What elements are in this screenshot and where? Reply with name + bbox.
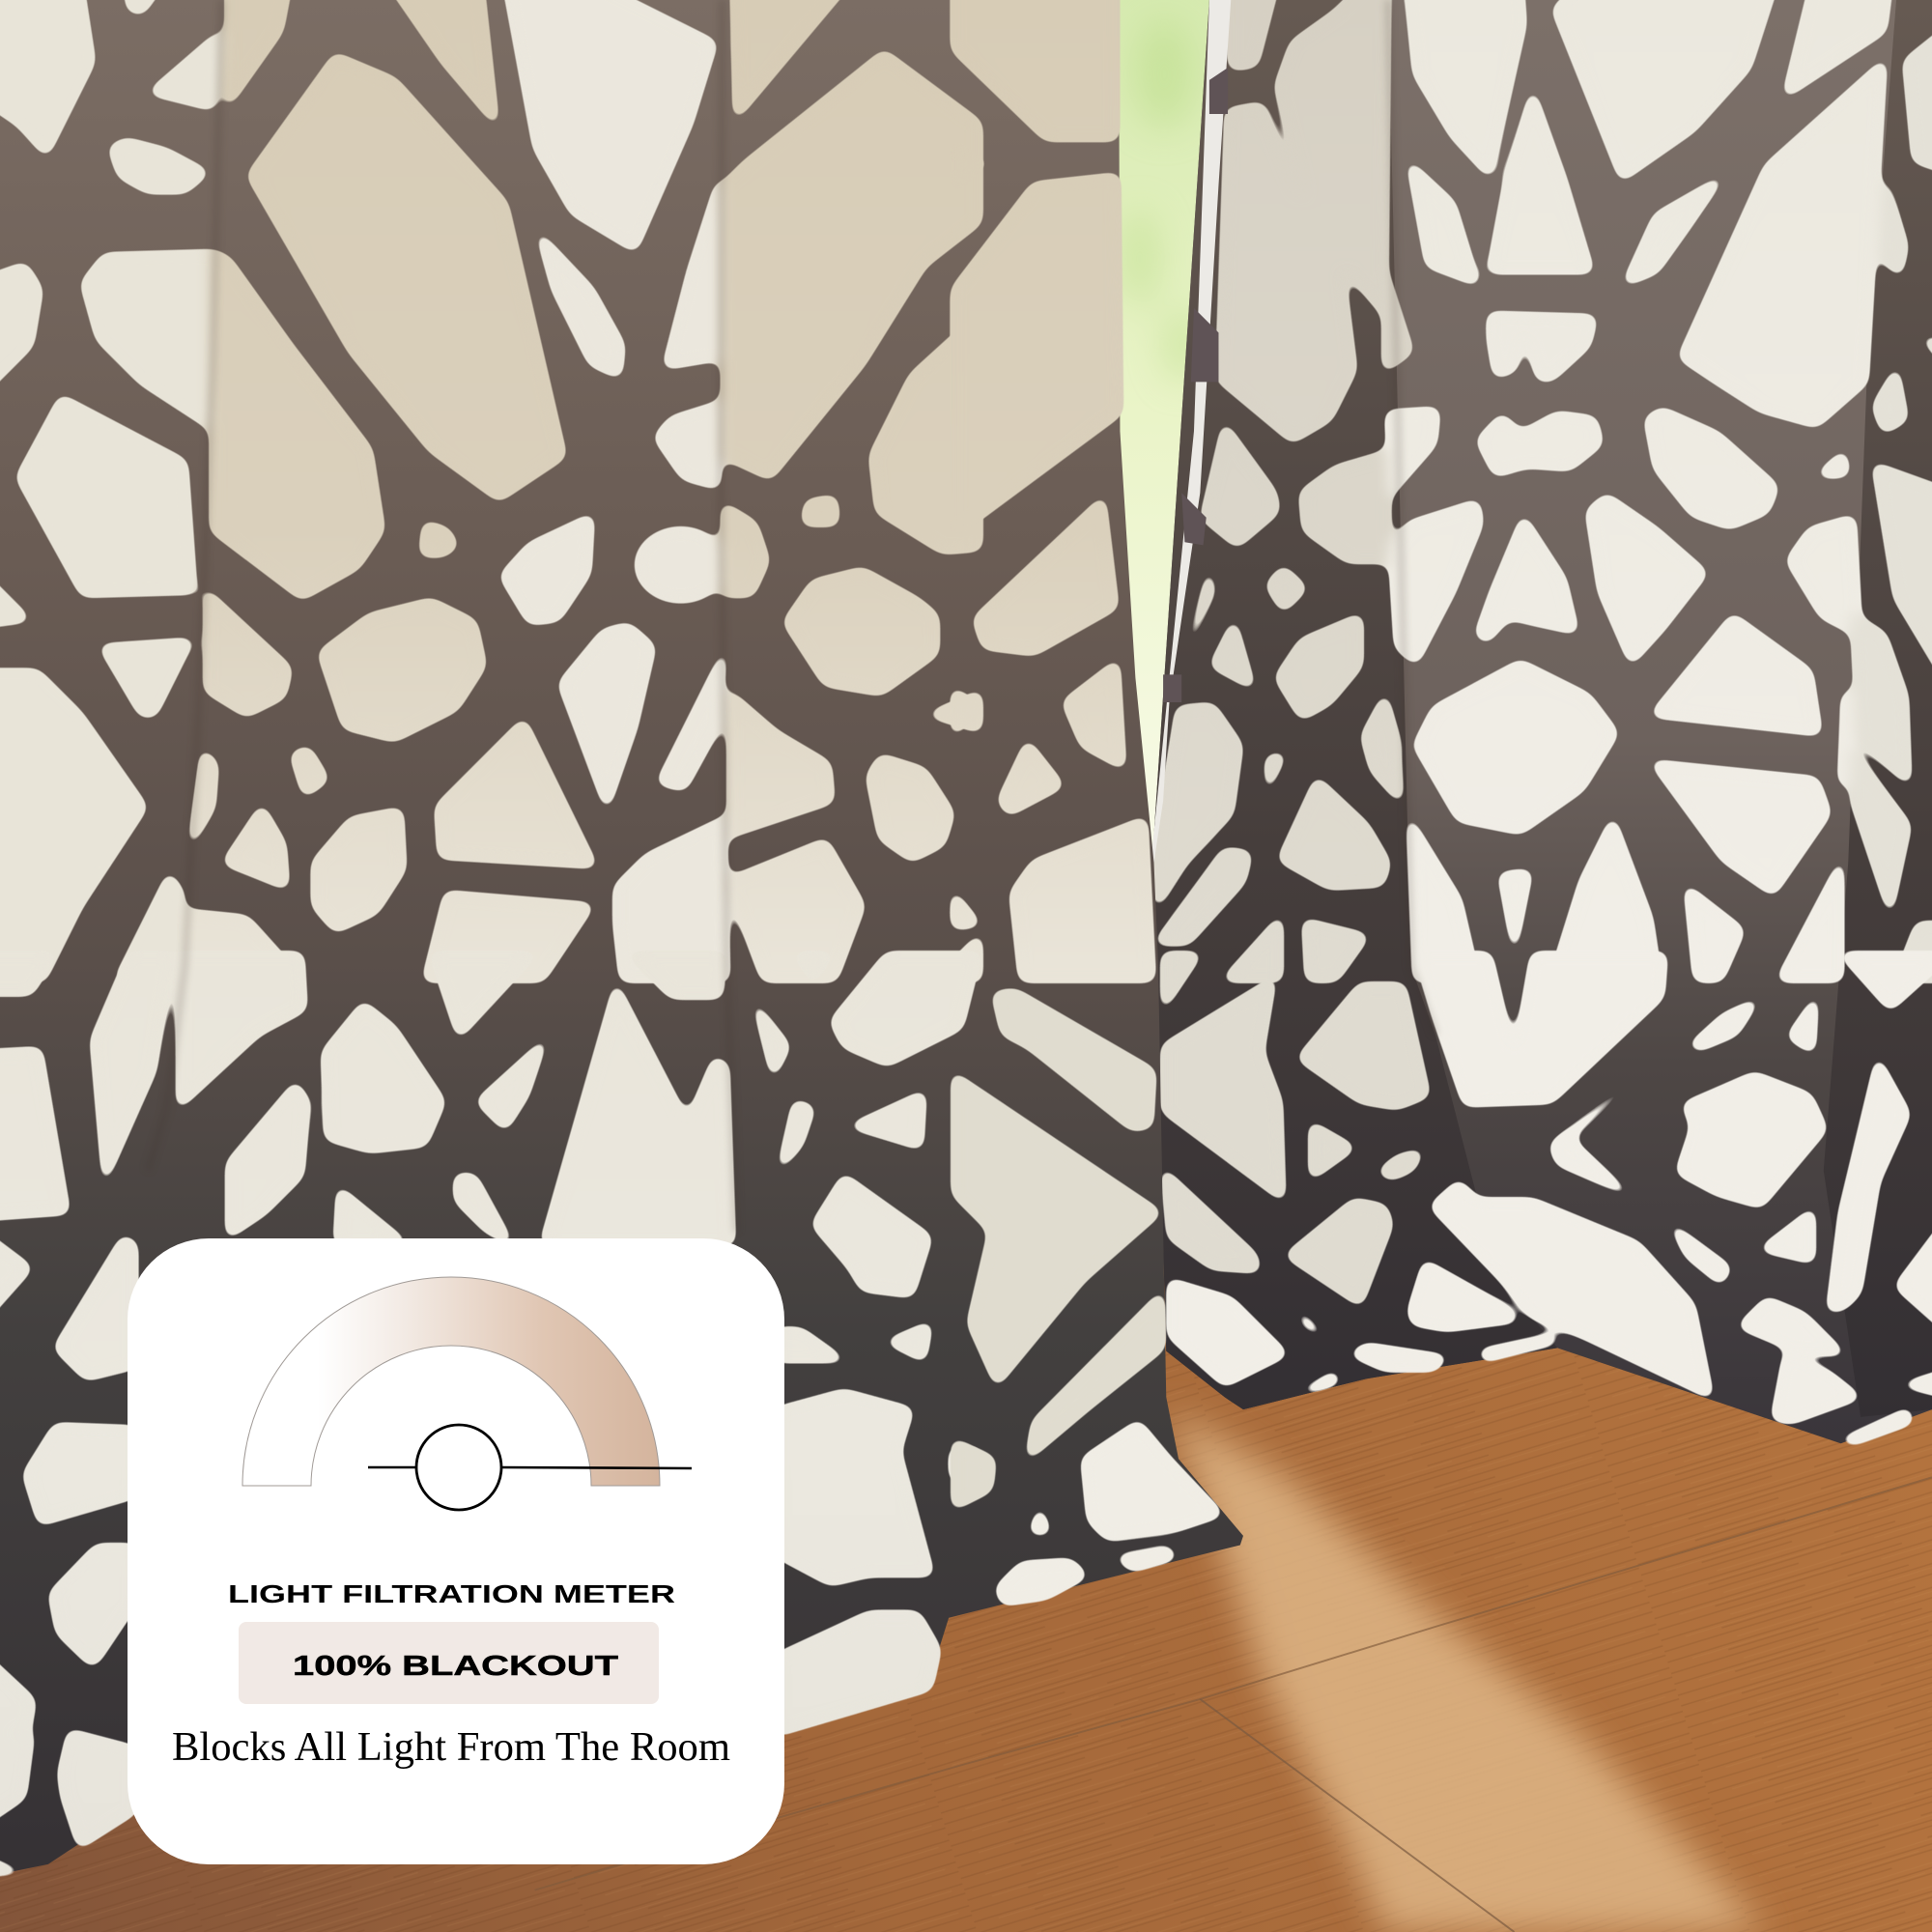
white curtain edge strip	[1151, 0, 1231, 863]
fabric fold shadows	[148, 0, 1435, 1233]
icon: gauge arc	[242, 1277, 660, 1486]
middle panel shaded fabric	[1152, 0, 1557, 1409]
right curtain pattern cells, upper	[1154, 0, 1932, 980]
badge: 100% blackout	[239, 1622, 659, 1704]
text: description: Blocks All Light From The Room	[172, 1725, 730, 1770]
right curtain pattern cells, hem	[1163, 953, 1932, 1443]
left curtain pattern cells, hem	[953, 991, 1222, 1604]
badge: 100% blackout: 100% BLACKOUT	[293, 1651, 618, 1682]
panel: light filtration meter card	[128, 1238, 784, 1864]
left curtain base	[0, 0, 1243, 1874]
icon: gauge needle	[368, 1425, 692, 1510]
heading: light filtration meter: LIGHT FILTRATION METER	[228, 1581, 675, 1608]
left curtain pattern cells, top right	[953, 0, 1152, 980]
far right panel shaded fabric	[1824, 0, 1932, 1417]
left curtain pattern cells, lower left	[0, 953, 980, 1874]
window gap with daylight	[1103, 0, 1226, 924]
right curtain base	[1152, 0, 1932, 1443]
wooden floor	[0, 924, 1932, 1932]
left curtain pattern cells, top left	[0, 0, 980, 980]
